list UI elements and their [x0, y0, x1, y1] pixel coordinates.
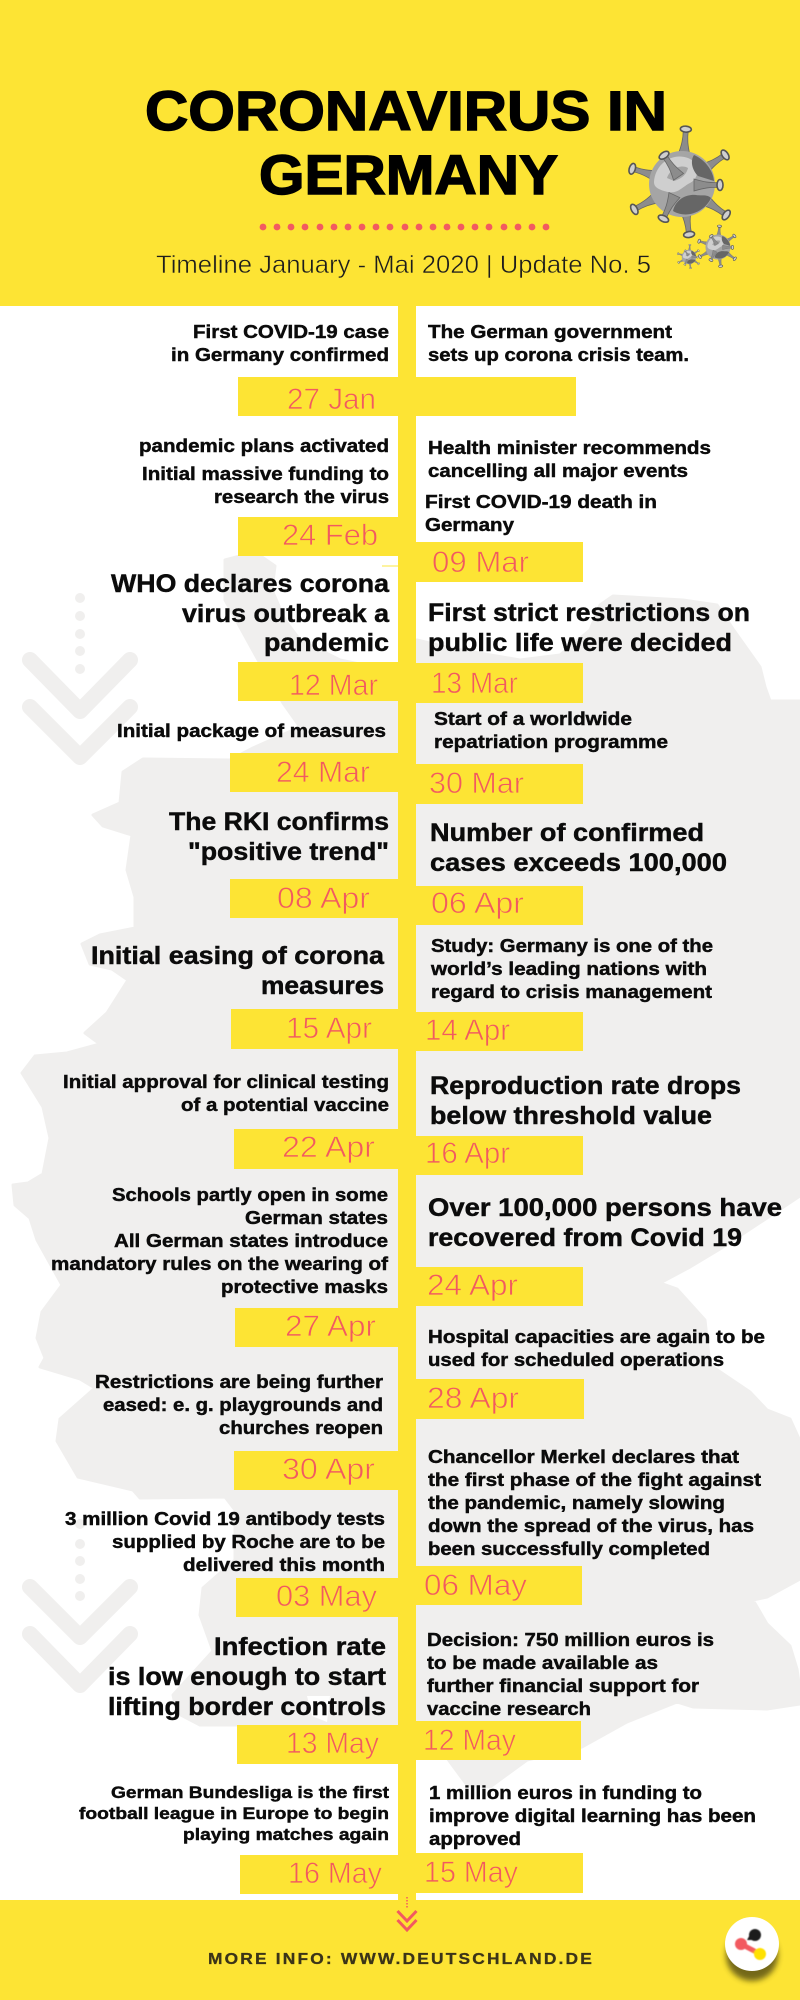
- background map of Germany: [13, 556, 800, 1787]
- event: hospital capacities: used for scheduled operations: [428, 1349, 724, 1370]
- event: confirmed cases: cases exceeds 100,000: [430, 849, 727, 877]
- event: digital learning: 1 million euros in funding to: [429, 1782, 702, 1803]
- date: 27 Jan: [238, 377, 576, 416]
- event: Bundesliga: playing matches again: [183, 1825, 389, 1844]
- event: study: [430, 935, 713, 1002]
- event: border controls: lifting border controls: [108, 1693, 386, 1721]
- date: 14 Apr: [416, 1012, 583, 1051]
- event: WHO pandemic: pandemic: [264, 629, 389, 657]
- event: crisis team: [428, 321, 689, 365]
- event: restrictions eased: Restrictions are being further: [95, 1371, 383, 1392]
- event: Merkel first phase: [428, 1446, 761, 1559]
- event: RKI positive trend: [169, 808, 389, 866]
- event: schools and masks: All German states introduce: [114, 1230, 388, 1251]
- event: WHO pandemic: WHO declares corona: [111, 570, 390, 598]
- title: CORONAVIRUS IN: [145, 79, 667, 142]
- event: first restrictions: First strict restrictions on: [428, 599, 750, 627]
- event: schools and masks: [51, 1184, 389, 1297]
- event: repatriation: repatriation programme: [434, 731, 668, 752]
- event: clinical testing: [63, 1071, 389, 1115]
- date: 16 Apr: [416, 1136, 583, 1175]
- icon: deutschland.de logo: [725, 1917, 779, 1981]
- event: crisis team: The German government: [428, 321, 672, 342]
- date: 16 Apr: 16 Apr: [425, 1137, 510, 1170]
- title: GERMANY: [259, 143, 558, 206]
- event: RKI positive trend: "positive trend": [188, 838, 389, 866]
- date: 24 Mar: [230, 753, 398, 792]
- event: Bundesliga: [79, 1783, 389, 1844]
- header panel: [0, 0, 800, 306]
- event: WHO pandemic: [111, 570, 390, 657]
- event: initial easing: measures: [261, 972, 384, 1000]
- event: Merkel first phase: been successfully completed: [428, 1538, 710, 1559]
- event: schools and masks: protective masks: [221, 1276, 388, 1297]
- event: border controls: Infection rate: [214, 1633, 386, 1661]
- event: study: world’s leading nations with: [430, 958, 707, 979]
- event: restrictions eased: eased: e. g. playgrounds and: [103, 1394, 383, 1415]
- date: 28 Apr: 28 Apr: [427, 1382, 519, 1415]
- event: pandemic plans and funding: [139, 435, 389, 507]
- date: 24 Mar: 24 Mar: [276, 756, 370, 789]
- event: antibody tests: 3 million Covid 19 antibody tests: [65, 1508, 385, 1529]
- event: study: Study: Germany is one of the: [431, 935, 713, 956]
- event: study: regard to crisis management: [431, 981, 712, 1002]
- event: pandemic plans and funding: pandemic plans activated: [139, 435, 389, 456]
- date: 15 May: [416, 1853, 583, 1893]
- date: 12 Mar: [238, 662, 398, 702]
- event: First COVID-19 case: in Germany confirmed: [171, 344, 389, 365]
- date: 15 Apr: [231, 1009, 398, 1049]
- date: 12 Mar: 12 Mar: [289, 669, 378, 702]
- date: 12 May: [416, 1721, 581, 1760]
- event: health minister: [428, 437, 711, 481]
- date: 03 May: [236, 1578, 398, 1617]
- event: digital learning: approved: [429, 1828, 521, 1849]
- event: restrictions eased: churches reopen: [219, 1417, 383, 1438]
- date: 13 May: 13 May: [286, 1727, 379, 1760]
- event: antibody tests: [65, 1508, 385, 1575]
- event: hospital capacities: [428, 1326, 765, 1370]
- date: 09 Mar: 09 Mar: [432, 546, 529, 579]
- event: first restrictions: [428, 599, 750, 657]
- event: Merkel first phase: Chancellor Merkel declares that: [428, 1446, 739, 1467]
- date: 13 May: [237, 1725, 398, 1764]
- event: reproduction rate: [430, 1072, 741, 1130]
- event: initial easing: Initial easing of corona: [91, 942, 385, 970]
- event: border controls: is low enough to start: [108, 1663, 387, 1691]
- event: first death: Germany: [425, 514, 515, 535]
- date: 06 May: 06 May: [424, 1569, 527, 1602]
- date: 24 Feb: [238, 517, 398, 556]
- event: Bundesliga: football league in Europe to begin: [79, 1804, 389, 1823]
- event: clinical testing: of a potential vaccine: [181, 1094, 389, 1115]
- event: recovered: recovered from Covid 19: [428, 1224, 742, 1252]
- date: 15 Apr: 15 Apr: [286, 1012, 372, 1045]
- event: first death: [425, 491, 657, 535]
- event: initial package: Initial package of measures: [117, 720, 386, 741]
- date: 06 May: [416, 1566, 582, 1605]
- date: 09 Mar: [416, 542, 583, 582]
- timeline spine: [398, 306, 416, 1900]
- decorative chevrons and dots, lower: [30, 1519, 130, 1685]
- event: restrictions eased: [95, 1371, 383, 1438]
- date: 27 Apr: 27 Apr: [285, 1310, 376, 1343]
- event: Merkel first phase: down the spread of the virus, has: [428, 1515, 754, 1536]
- event: vaccine funding: further financial support for: [427, 1675, 699, 1696]
- event: recovered: Over 100,000 persons have: [428, 1194, 782, 1222]
- event: schools and masks: Schools partly open in some: [112, 1184, 388, 1205]
- date: 27 Apr: [235, 1308, 398, 1347]
- event: vaccine funding: to be made available as: [427, 1652, 658, 1673]
- date: 08 Apr: [230, 879, 398, 918]
- date: 13 Mar: 13 Mar: [431, 667, 518, 700]
- event: WHO pandemic: virus outbreak a: [182, 600, 390, 628]
- event: RKI positive trend: The RKI confirms: [169, 808, 389, 836]
- date: 30 Mar: 30 Mar: [429, 767, 524, 800]
- date: 30 Apr: 30 Apr: [282, 1453, 375, 1486]
- event: schools and masks: mandatory rules on the wearing of: [51, 1253, 389, 1274]
- date: 22 Apr: [234, 1129, 398, 1169]
- event: hospital capacities: Hospital capacities are again to be: [428, 1326, 765, 1347]
- title: [145, 79, 667, 206]
- event: health minister: Health minister recommends: [428, 437, 711, 458]
- event: first restrictions: public life were decided: [428, 629, 732, 657]
- icon: coronavirus cluster: [628, 126, 737, 269]
- date: 03 May: 03 May: [276, 1580, 377, 1613]
- date: 24 Feb: 24 Feb: [282, 519, 378, 552]
- more info link text: MORE INFO: WWW.DEUTSCHLAND.DE: [208, 1951, 594, 1968]
- event: recovered: [428, 1194, 782, 1252]
- date: 24 Apr: [416, 1267, 583, 1306]
- date: 15 May: 15 May: [424, 1856, 518, 1889]
- arrow: down chevrons: [398, 1897, 416, 1930]
- event: pandemic plans and funding: Initial massive funding to: [142, 463, 389, 484]
- event: reproduction rate: Reproduction rate drops: [430, 1072, 741, 1100]
- event: digital learning: [429, 1782, 756, 1849]
- date: 13 Mar: [416, 663, 583, 703]
- event: vaccine funding: [427, 1629, 714, 1719]
- date: 30 Apr: [234, 1451, 398, 1490]
- event: repatriation: Start of a worldwide: [434, 708, 632, 729]
- decorative chevrons and dots, upper: [30, 593, 130, 757]
- event: pandemic plans and funding: research the virus: [214, 486, 389, 507]
- event: confirmed cases: Number of confirmed: [430, 819, 704, 847]
- event: confirmed cases: [430, 819, 727, 877]
- date: 06 Apr: [416, 886, 583, 925]
- event: antibody tests: supplied by Roche are to be: [112, 1531, 385, 1552]
- event: reproduction rate: below threshold value: [430, 1102, 712, 1130]
- date: 28 Apr: [416, 1379, 584, 1419]
- footer panel: [0, 1897, 800, 2000]
- event: first death: First COVID-19 death in: [425, 491, 657, 512]
- event: crisis team: sets up corona crisis team.: [428, 344, 689, 365]
- event: vaccine funding: vaccine research: [427, 1698, 591, 1719]
- event: clinical testing: Initial approval for clinical testing: [63, 1071, 389, 1092]
- date: 16 May: 16 May: [288, 1857, 382, 1890]
- event: health minister: cancelling all major events: [428, 460, 688, 481]
- subtitle: Timeline January - Mai 2020 | Update No. 5: [156, 251, 651, 279]
- event: Merkel first phase: the pandemic, namely slowing: [428, 1492, 725, 1513]
- date: 27 Jan: 27 Jan: [287, 383, 376, 416]
- date: 22 Apr: 22 Apr: [282, 1131, 375, 1164]
- event: repatriation: [434, 708, 668, 752]
- event: initial easing: [91, 942, 385, 1000]
- event: border controls: [108, 1633, 387, 1721]
- event: First COVID-19 case: [171, 321, 389, 365]
- date: 08 Apr: 08 Apr: [277, 882, 370, 915]
- dotted divider: [260, 224, 549, 230]
- date: 06 Apr: 06 Apr: [431, 887, 524, 920]
- event: vaccine funding: Decision: 750 million euros is: [427, 1629, 714, 1650]
- event: First COVID-19 case: First COVID-19 case: [193, 321, 389, 342]
- event: Bundesliga: German Bundesliga is the first: [111, 1783, 389, 1802]
- event: digital learning: improve digital learning has been: [429, 1805, 756, 1826]
- date: 24 Apr: 24 Apr: [427, 1269, 518, 1302]
- date: 14 Apr: 14 Apr: [425, 1014, 510, 1047]
- event: antibody tests: delivered this month: [183, 1554, 385, 1575]
- date: 16 May: [240, 1855, 398, 1894]
- date: 12 May: 12 May: [423, 1724, 516, 1757]
- date: 30 Mar: [416, 764, 583, 804]
- event: Merkel first phase: the first phase of the fight against: [428, 1469, 761, 1490]
- event: schools and masks: German states: [245, 1207, 388, 1228]
